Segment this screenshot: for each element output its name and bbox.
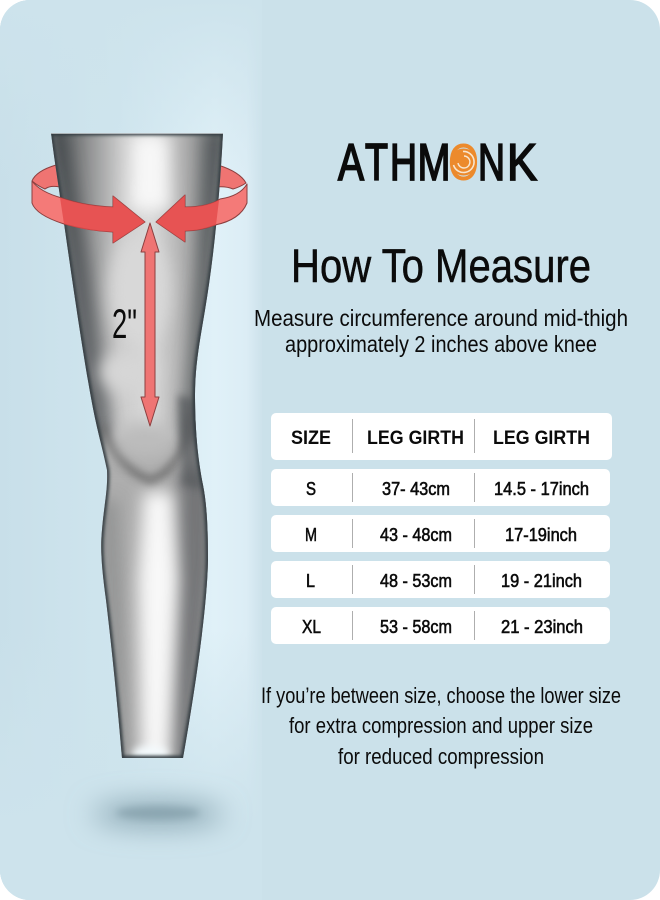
- footer note: for reduced compression: [338, 744, 544, 769]
- logo: ATHMONK: K: [507, 134, 537, 192]
- row S: 14.5 - 17inch: [494, 478, 589, 499]
- lower leg shading: [101, 462, 208, 758]
- row L: 19 - 21inch: [501, 570, 582, 591]
- logo: ATHMONK: N: [478, 134, 505, 192]
- back of circumference band: [32, 165, 246, 189]
- row XL: [271, 607, 610, 644]
- table header row: SIZE: [291, 428, 331, 449]
- size table: [271, 413, 612, 644]
- row S: [271, 469, 610, 506]
- row L: L: [306, 570, 315, 591]
- table header row: LEG GIRTH: [493, 428, 590, 449]
- heading: How To Measure: [291, 239, 591, 292]
- footer note: [261, 683, 621, 769]
- knee creases: [102, 395, 202, 490]
- table header row: LEG GIRTH: [367, 428, 464, 449]
- row M: 43 - 48cm: [380, 524, 452, 545]
- row XL: XL: [302, 616, 321, 637]
- left arrow band: [32, 181, 145, 243]
- label: 2 inches: 2": [112, 300, 137, 347]
- leg illustration: [51, 133, 223, 758]
- circumference arrows: [32, 181, 247, 243]
- row M: [271, 515, 610, 552]
- logo: ATHMONK: A: [338, 134, 364, 192]
- table header row: [271, 413, 612, 460]
- row XL: 53 - 58cm: [380, 616, 452, 637]
- logo: ATHMONK: [338, 134, 537, 192]
- leg shadow: [92, 802, 224, 826]
- footer note: for extra compression and upper size: [289, 713, 593, 738]
- logo swirl O: O: [448, 134, 479, 192]
- instructions: approximately 2 inches above knee: [285, 331, 597, 357]
- row M: 17-19inch: [505, 524, 577, 545]
- 2 inch vertical arrow: [141, 223, 159, 426]
- row M: M: [305, 524, 317, 545]
- right arrow band: [156, 184, 247, 242]
- instructions: [254, 305, 628, 357]
- row S: S: [306, 478, 316, 499]
- logo: ATHMONK: M: [418, 134, 450, 192]
- row L: 48 - 53cm: [380, 570, 452, 591]
- row S: 37- 43cm: [382, 478, 450, 499]
- row L: [271, 561, 610, 598]
- logo: ATHMONK: H: [390, 134, 417, 192]
- row XL: 21 - 23inch: [501, 616, 583, 637]
- logo: ATHMONK: T: [365, 134, 388, 192]
